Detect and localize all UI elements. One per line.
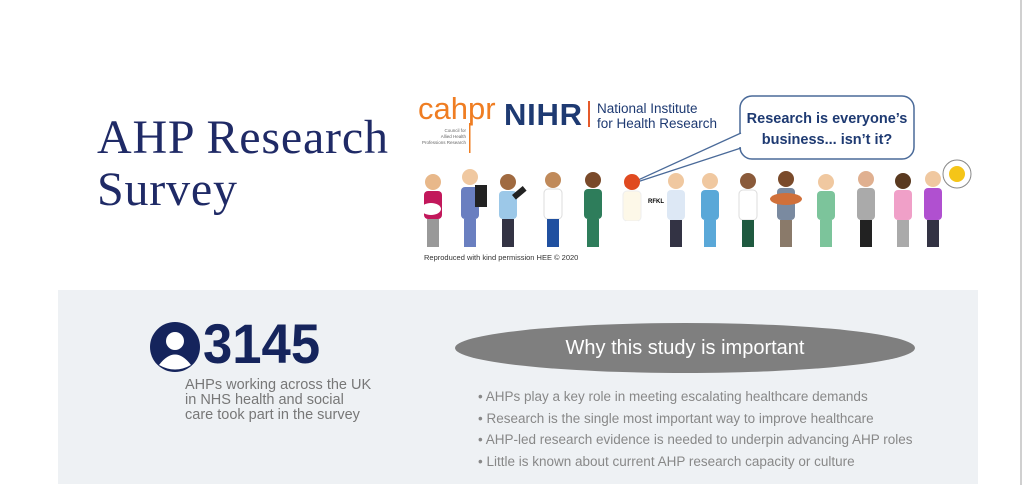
logo: cahpr: Allied Health — [441, 134, 466, 139]
stat description — [185, 377, 371, 423]
illustration: logos, speech bubble and figures — [418, 91, 972, 262]
heading pill: why this study is important: Why this study is important — [566, 337, 804, 359]
stat description: AHPs working across the UK — [185, 377, 371, 393]
title: AHP Research — [97, 111, 389, 164]
logo: NIHR: National Institute — [597, 101, 698, 116]
icon: person — [150, 322, 200, 372]
logo: cahpr: Council for — [444, 128, 466, 133]
logo: cahpr: cahpr — [418, 91, 496, 126]
figures — [421, 169, 942, 247]
logo: NIHR: NIHR — [504, 97, 582, 132]
speech bubble — [625, 96, 914, 186]
bullet list: • Little is known about current AHP research capacity or culture — [478, 454, 855, 468]
logo: NIHR: for Health Research — [597, 116, 717, 131]
title: Survey — [97, 163, 238, 216]
bullet list: • AHPs play a key role in meeting escalating healthcare demands — [478, 389, 868, 404]
icon: smiley — [943, 160, 971, 188]
panel: summary — [58, 290, 978, 484]
logo: cahpr — [418, 91, 496, 153]
bullet list: • Research is the single most important way to improve healthcare — [478, 410, 874, 426]
bullet list: • AHP-led research evidence is needed to underpin advancing AHP roles — [478, 432, 912, 447]
logo: NIHR — [504, 97, 717, 132]
bullet list — [478, 389, 912, 469]
title — [97, 111, 389, 216]
stat number: 3145 — [203, 312, 320, 375]
speech bubble: Research is everyone’s — [747, 111, 907, 127]
heading pill: why this study is important — [455, 323, 915, 373]
speech bubble: business... isn’t it? — [762, 132, 892, 148]
logo: cahpr: Professions Research — [422, 140, 466, 145]
credit caption: Reproduced with kind permission HEE © 2020 — [424, 253, 578, 262]
stat description: care took part in the survey — [185, 407, 360, 423]
stat description: in NHS health and social — [185, 392, 344, 408]
figures: RFKL — [648, 199, 664, 205]
